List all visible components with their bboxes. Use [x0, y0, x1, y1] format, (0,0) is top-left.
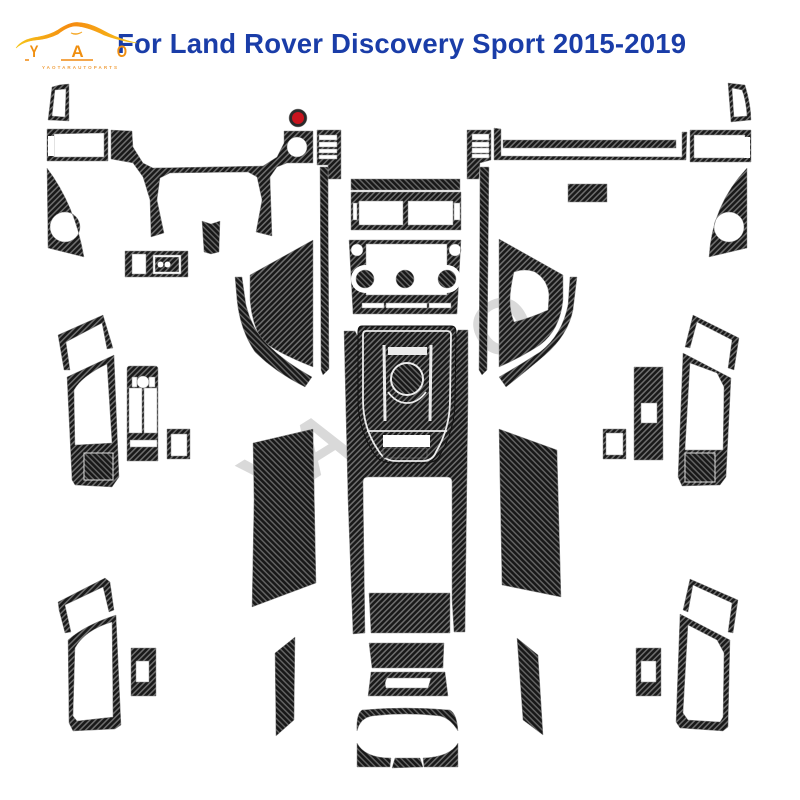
- part: front left switch box: [84, 453, 113, 480]
- shifter dial: [391, 363, 423, 395]
- part: left arc strip: [235, 277, 312, 387]
- carbon fibre parts: [47, 83, 751, 768]
- part: front left small switch frame: [167, 429, 190, 459]
- part: left dash vent frame: [47, 129, 108, 161]
- part: long dash bracket: [494, 128, 687, 160]
- watermark: O: [452, 273, 550, 379]
- logo underlines: [25, 59, 93, 61]
- shifter dial outer arc: [388, 392, 426, 403]
- part: right centre vent grid: [467, 130, 491, 179]
- part: right door panel: [499, 239, 563, 367]
- part: right pillar triangle: [709, 168, 747, 257]
- part: climate control panel: [349, 240, 461, 314]
- part: rear right small switch frame: [636, 648, 661, 696]
- logo: [16, 22, 137, 70]
- part: small chevron trim: [202, 221, 220, 254]
- part: right vent tab: [744, 137, 750, 158]
- part: large right side panel: [499, 429, 561, 597]
- part: cupholder lower left: [357, 743, 391, 767]
- part: left long strip: [320, 167, 329, 375]
- part: centre top bar: [351, 179, 460, 190]
- part: rear left door arch: [58, 578, 114, 633]
- part: rear right door arch: [683, 579, 738, 633]
- shifter lower window: [383, 435, 430, 447]
- shifter top slot: [388, 347, 427, 355]
- part: left pillar triangle: [47, 168, 84, 257]
- part: dashboard Y trim: [111, 130, 313, 237]
- part: small rectangular trim: [568, 184, 607, 202]
- part: console lower pad: [369, 593, 450, 633]
- logo letters: Y: [30, 43, 38, 61]
- part: left centre vent grid: [317, 130, 341, 179]
- part: right top vent surround: [728, 83, 751, 122]
- part: front left door panel: [67, 355, 119, 487]
- part: cupholder lower middle: [392, 758, 423, 768]
- part: gear shifter surround: [358, 326, 456, 463]
- watermark: [224, 273, 550, 526]
- shifter side rails: [384, 345, 431, 421]
- logo letters: [30, 42, 127, 61]
- part: front right switch box: [685, 453, 715, 482]
- part: lower centre plate: [369, 643, 444, 668]
- logo car swoosh: [16, 22, 137, 48]
- part: large left side panel: [252, 429, 316, 607]
- part: left vent tab: [48, 136, 54, 156]
- part: rear left small switch frame: [131, 648, 156, 696]
- part: front right door arch: [685, 315, 739, 370]
- part: rear left door panel: [68, 615, 121, 731]
- part: front left door arch: [58, 315, 113, 370]
- part: switch panel inset: [155, 257, 179, 272]
- part: rear right door panel: [676, 614, 730, 731]
- part: cupholder lower right: [423, 743, 458, 767]
- part: centre console frame: [344, 330, 468, 634]
- part: left door panel: [250, 240, 313, 367]
- watermark: Y: [224, 424, 315, 526]
- part: front right window switch panel: [634, 367, 663, 460]
- part: front right door panel: [678, 353, 731, 486]
- watermark: A: [272, 392, 367, 496]
- logo tagline: YAOTARAUTOPARTS: [42, 65, 117, 70]
- shifter lower tab: [383, 448, 427, 458]
- logo windshield mark: [71, 32, 82, 34]
- part: front left window switch panel: [127, 366, 158, 461]
- part: right arc strip: [499, 277, 577, 387]
- logo letters: A: [71, 42, 84, 61]
- part: start button: [289, 109, 307, 127]
- title: For Land Rover Discovery Sport 2015-2019: [117, 28, 686, 59]
- part: front right small switch frame: [603, 429, 626, 459]
- part: bottom left strip: [275, 637, 295, 736]
- part: centre air vent: [351, 192, 461, 230]
- part: cupholder upper arc: [357, 708, 458, 731]
- part: left top vent surround: [48, 84, 69, 121]
- part: lower centre slotted plate: [368, 672, 448, 696]
- part: right long strip: [479, 167, 489, 375]
- part: long dash bar: [503, 140, 676, 148]
- part: steering column switch panel: [125, 251, 188, 277]
- part: bottom right strip: [517, 638, 543, 735]
- logo letters: O: [117, 43, 127, 61]
- part: right dash vent frame: [690, 130, 751, 162]
